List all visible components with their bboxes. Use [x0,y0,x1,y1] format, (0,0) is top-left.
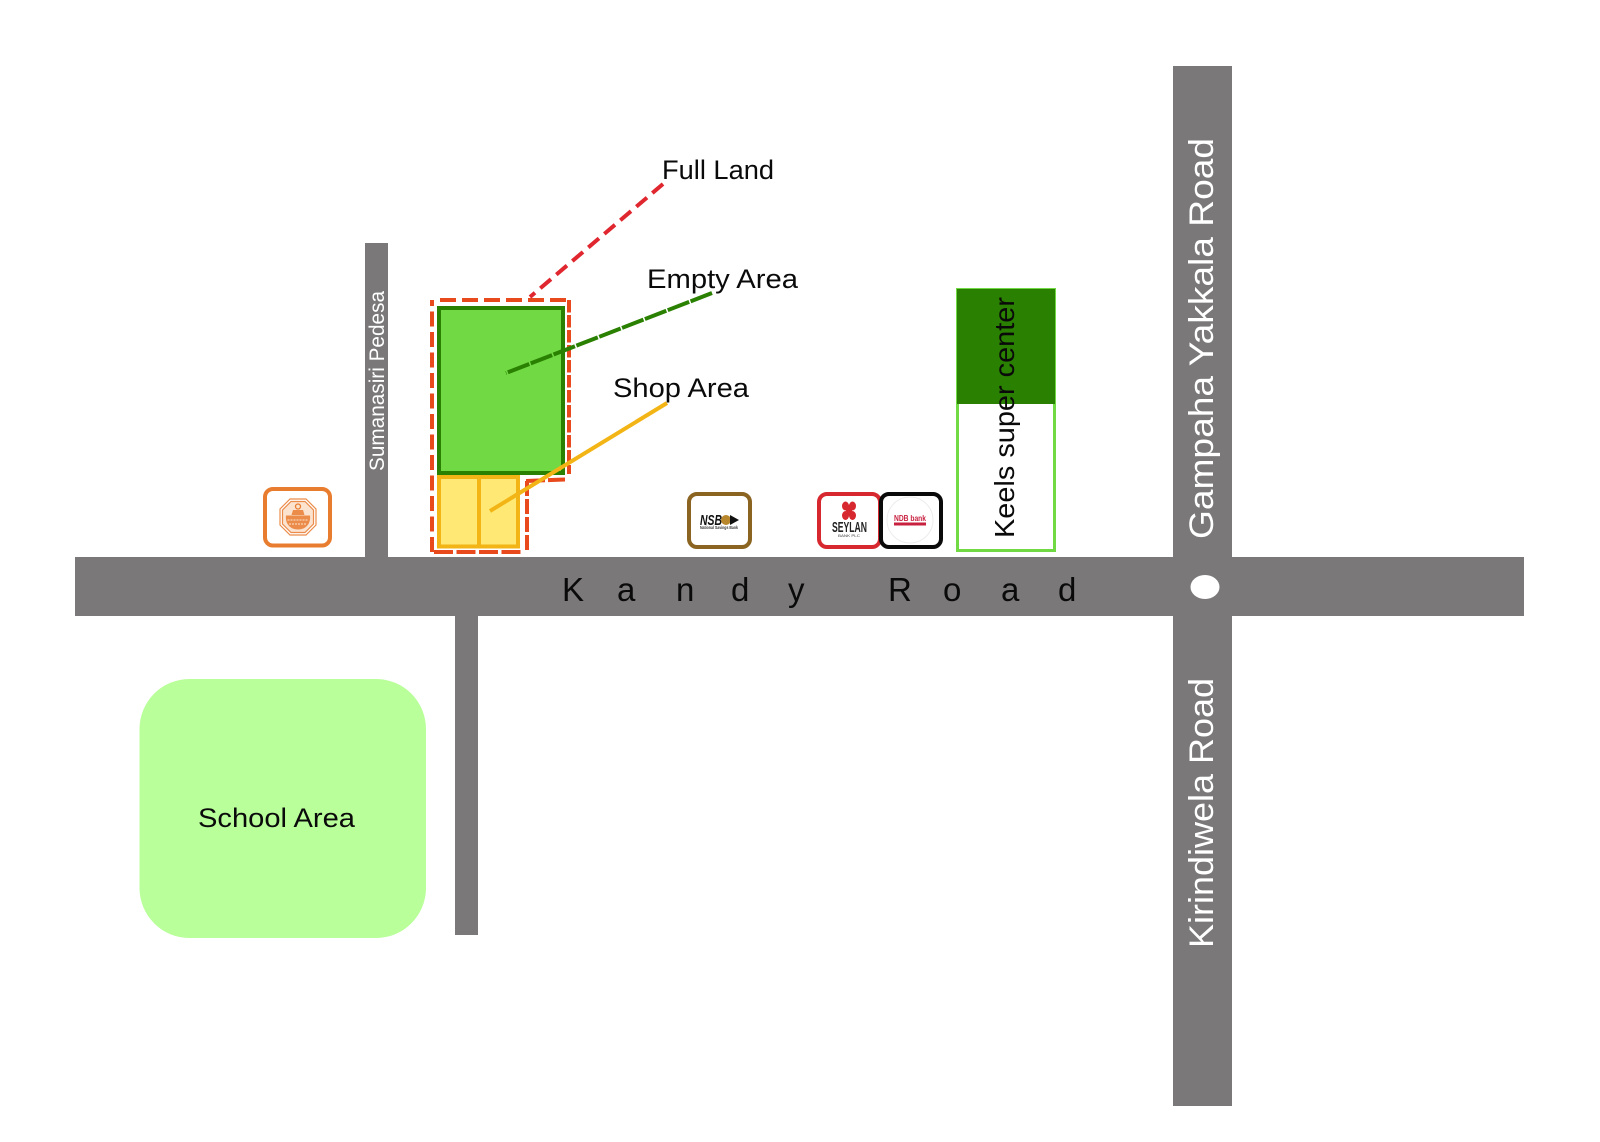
icon: NSB bank logo [689,494,750,547]
icon: Seylan bank logo: SEYLAN [832,519,867,536]
label: Keels super center: Keels super center [989,297,1020,538]
full land dashed boundary [432,300,569,552]
icon: orange temple-style bank logo [265,489,330,546]
road: Gampaha Yakkala and Kirindiwela vertical road [1173,66,1232,1106]
empty area plot [439,308,563,473]
building roof block [957,289,1055,404]
icon: NDB bank logo: NDB bank [894,514,926,523]
icon: Seylan bank logo [819,494,880,547]
icon: NSB bank logo: NSB [700,512,722,529]
road label: Gampaha Yakkala Road: Gampaha Yakkala Road [1183,138,1221,539]
road: Sumanasiri Pedesa [365,243,388,558]
label: Empty Area: Empty Area [647,264,799,294]
shop area plot [439,476,518,548]
road label: Kandy Road: Kandy Road [562,571,1076,608]
icon: NSB bank logo: National Savings Bank [700,525,738,530]
road label: Sumanasiri Pedesa: Sumanasiri Pedesa [366,291,389,471]
label: Shop Area: Shop Area [613,373,750,403]
callout line: shop area [490,403,667,511]
school area [140,679,426,938]
road: unnamed side road [455,615,478,935]
label: Full Land: Full Land [662,155,774,185]
label: School Area: School Area [198,803,356,833]
icon: Seylan bank logo: BANK PLC [838,533,860,538]
icon: NDB bank logo [881,494,941,547]
callout line: empty area [506,293,712,373]
road: Kandy Road [75,557,1524,616]
junction marker [1190,575,1220,599]
callout line: full land [530,184,663,297]
road label: Kirindiwela Road: Kirindiwela Road [1183,678,1221,948]
Keels super center building [957,289,1055,550]
